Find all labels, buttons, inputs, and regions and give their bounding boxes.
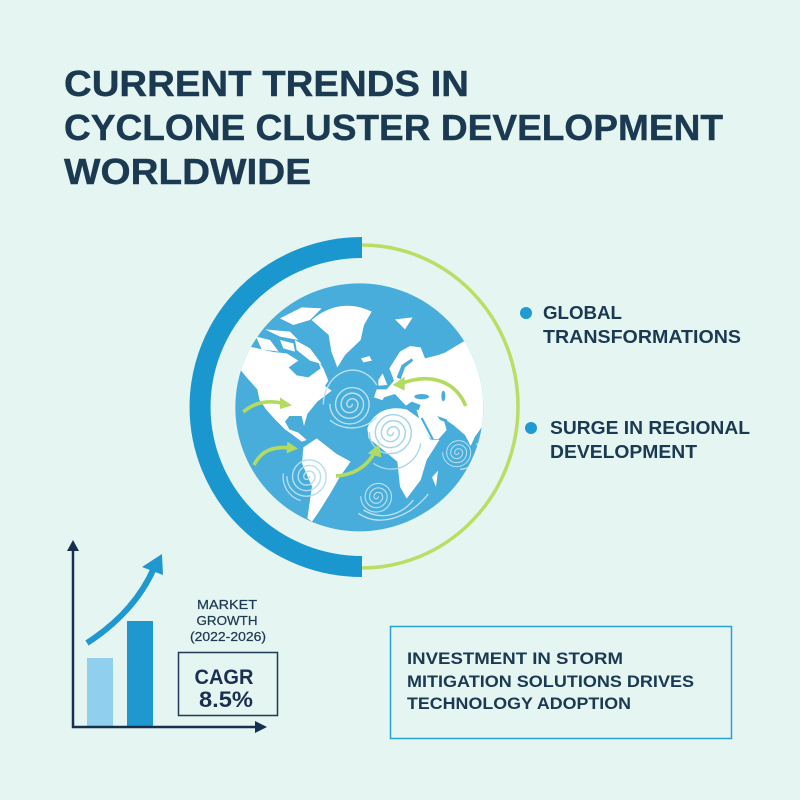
madagascar xyxy=(432,471,438,487)
arrow: asia to europe xyxy=(393,377,466,406)
axis arrowheads xyxy=(67,540,267,733)
legend item: surge in regional development xyxy=(525,417,750,462)
market growth label: (2022-2026) xyxy=(190,629,266,644)
blue progress ring xyxy=(200,248,362,566)
callout: investment: MITIGATION SOLUTIONS DRIVES xyxy=(407,672,694,691)
market growth label xyxy=(190,597,266,644)
CAGR box: CAGR xyxy=(194,666,254,689)
arctic islands xyxy=(256,307,322,364)
legend item: global transformations xyxy=(520,302,741,347)
title xyxy=(64,63,723,192)
title: CURRENT TRENDS IN xyxy=(64,63,469,104)
bar: light xyxy=(87,658,113,726)
iceland xyxy=(361,356,372,362)
callout: investment: TECHNOLOGY ADOPTION xyxy=(407,694,631,713)
british isles xyxy=(378,373,387,386)
bar: dark xyxy=(127,621,153,726)
callout: investment: INVESTMENT IN STORM xyxy=(407,649,623,668)
title: WORLDWIDE xyxy=(64,151,311,192)
greenland xyxy=(312,306,372,368)
title: CYCLONE CLUSTER DEVELOPMENT xyxy=(64,107,723,148)
cyclone: west africa xyxy=(369,415,421,469)
legend item: global transformations: GLOBAL xyxy=(543,302,622,323)
chart axes xyxy=(73,545,258,727)
africa xyxy=(367,408,439,499)
globe xyxy=(230,283,497,531)
bar chart xyxy=(67,540,267,733)
arrow: pacific to central america xyxy=(254,442,298,465)
cyclone: north atlantic xyxy=(323,370,377,428)
cyclone: south atlantic xyxy=(358,483,428,520)
green flow arrows xyxy=(243,377,466,476)
green progress ring xyxy=(362,245,518,568)
arrow: south america to africa xyxy=(336,444,381,476)
growth arrow xyxy=(87,568,154,643)
arrow: pacific to north america xyxy=(243,397,292,412)
inland seas xyxy=(379,329,455,440)
cyclone: indian ocean xyxy=(443,441,478,469)
market growth label: MARKET xyxy=(197,597,257,612)
callout: investment xyxy=(390,626,732,738)
market growth label: GROWTH xyxy=(196,613,258,628)
legend item: global transformations: TRANSFORMATIONS xyxy=(543,326,741,347)
CAGR box xyxy=(178,652,278,716)
eurasia xyxy=(374,342,484,446)
north america xyxy=(241,347,332,442)
svalbard xyxy=(395,317,413,329)
legend item: surge in regional development: DEVELOPMENT xyxy=(550,441,698,462)
legend item: surge in regional development: SURGE IN REGIONAL xyxy=(550,417,750,438)
CAGR box: 8.5% xyxy=(199,687,253,712)
south america xyxy=(302,438,351,522)
continents xyxy=(230,306,497,522)
cyclone spirals xyxy=(283,370,478,520)
cyclone: south america xyxy=(283,460,326,501)
